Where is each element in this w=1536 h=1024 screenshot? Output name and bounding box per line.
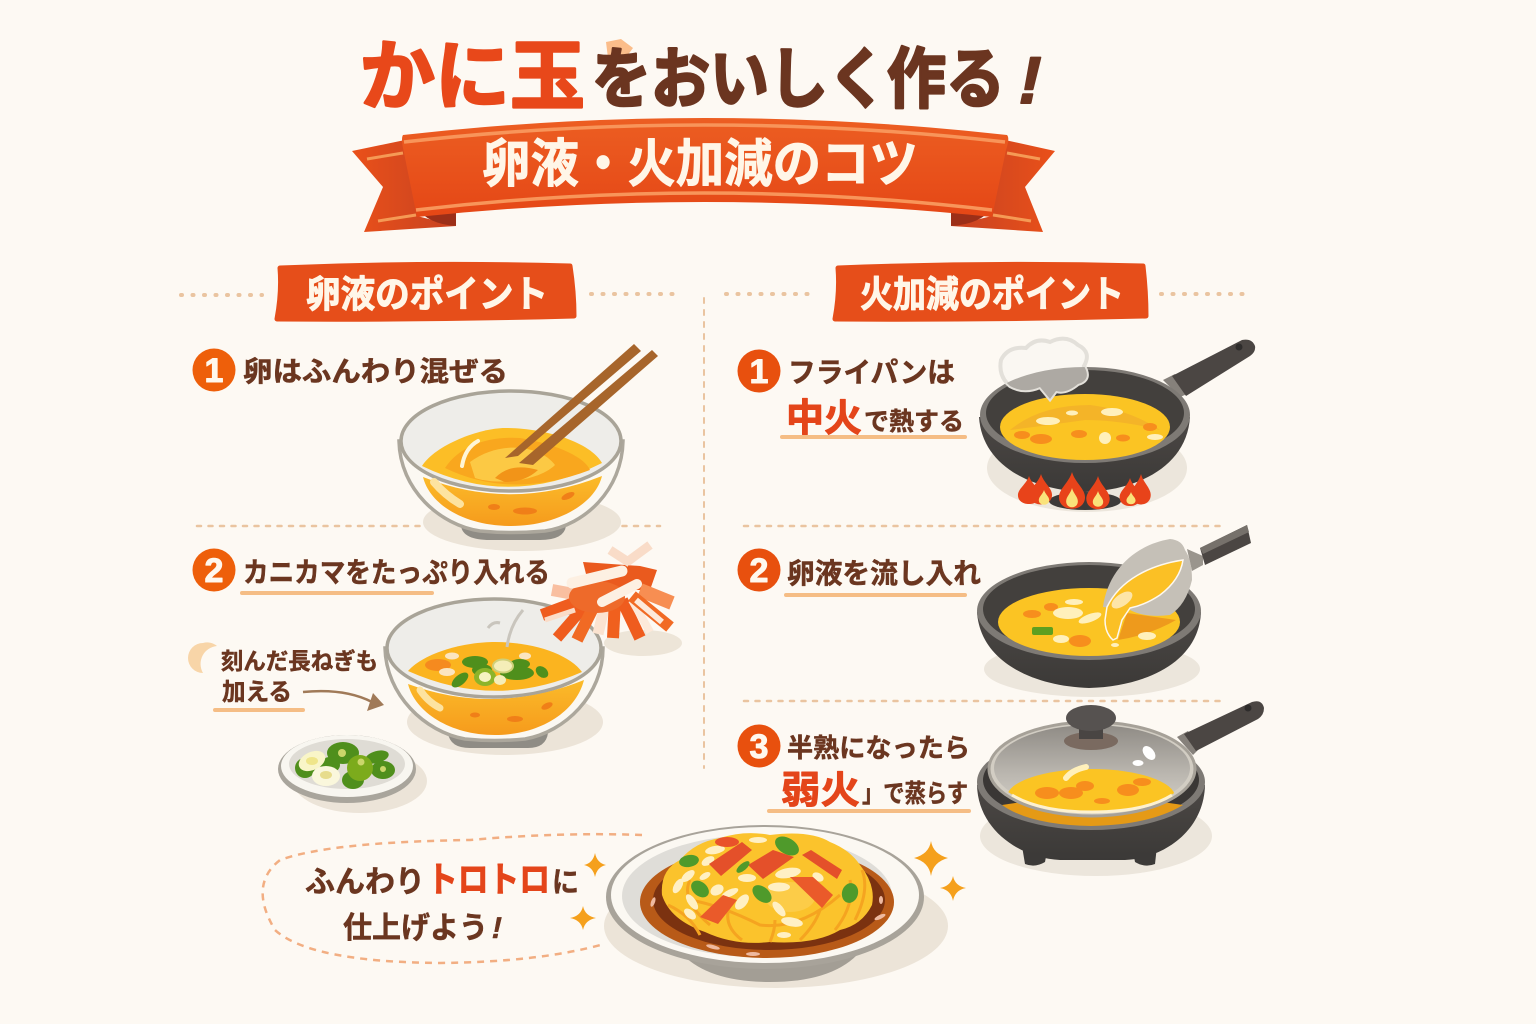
note: chopped green onion: [188, 642, 378, 710]
title: [360, 35, 1049, 120]
step: add crab sticks: [192, 548, 550, 593]
step: preheat pan at medium heat: [738, 350, 965, 440]
note: chopped green onion: 加える: [222, 679, 292, 706]
callout: トロトロ: [427, 861, 550, 900]
banner text: 卵液・火加減のコツ: [482, 136, 918, 194]
step: add crab sticks: カニカマをたっぷり入れる: [243, 557, 550, 588]
section heading: heat: 火加減のポイント: [860, 274, 1124, 315]
callout: !: [489, 912, 505, 945]
step: beat the eggs: 1: [205, 352, 223, 390]
arrow: [303, 691, 384, 711]
callout: ふんわり: [305, 866, 425, 899]
section heading: heat: [835, 264, 1146, 319]
ladle: [1103, 539, 1192, 616]
chopsticks: [505, 344, 658, 465]
note: chopped green onion: 刻んだ長ねぎも: [221, 648, 378, 674]
illustration: ladle pouring into pan: [977, 525, 1251, 697]
illustration: finished kani-tama: [604, 825, 948, 988]
illustration: crab sticks: [542, 545, 682, 656]
title: !: [1012, 45, 1049, 118]
step: pour egg mixture: 卵液を流し入れ: [787, 558, 981, 589]
title: かに玉: [360, 35, 585, 120]
feet: [1022, 846, 1048, 866]
step: preheat pan at medium heat: 1: [750, 353, 768, 391]
callout: 仕上げよう: [343, 912, 488, 945]
knob: [1064, 732, 1118, 750]
step: preheat pan at medium heat: フライパンは: [788, 357, 955, 388]
step: steam on low heat: 半熟になったら: [787, 733, 970, 763]
step: steam on low heat: 弱火: [781, 770, 860, 812]
title: をおいしく作る: [592, 42, 1005, 116]
steam: [1000, 339, 1087, 399]
step: pour egg mixture: [738, 548, 981, 595]
illustration: plate of green onions: [278, 735, 427, 813]
step: preheat pan at medium heat: で熱する: [864, 408, 964, 436]
illustration: lidded pan: [977, 701, 1264, 876]
step: beat the eggs: 卵はふんわり混ぜる: [243, 356, 508, 387]
flames: [1018, 472, 1151, 510]
sparkles: [570, 841, 966, 930]
section heading: egg: 卵液のポイント: [306, 274, 548, 315]
illustration: bowl with egg and onions: [385, 599, 603, 755]
illustration: pan on flames: [979, 339, 1255, 512]
egg mound: [662, 833, 873, 943]
step: pour egg mixture: 2: [750, 552, 768, 590]
step: steam on low heat: [738, 724, 970, 812]
step: beat the eggs: [192, 348, 508, 392]
step: preheat pan at medium heat: 中火: [786, 398, 862, 440]
illustration: bowl with chopsticks: [399, 344, 658, 551]
plate: [683, 955, 857, 982]
handle: [1187, 549, 1203, 571]
callout: [263, 834, 642, 963]
lid: [989, 722, 1195, 816]
callout: に: [552, 867, 579, 899]
handle: [1177, 731, 1200, 755]
step: steam on low heat: 」で蒸らす: [862, 780, 968, 808]
ribbon banner: [352, 118, 1055, 232]
handle: [1163, 374, 1192, 397]
step: steam on low heat: 3: [750, 728, 768, 766]
step: add crab sticks: 2: [205, 552, 223, 590]
section heading: egg: [277, 264, 574, 319]
